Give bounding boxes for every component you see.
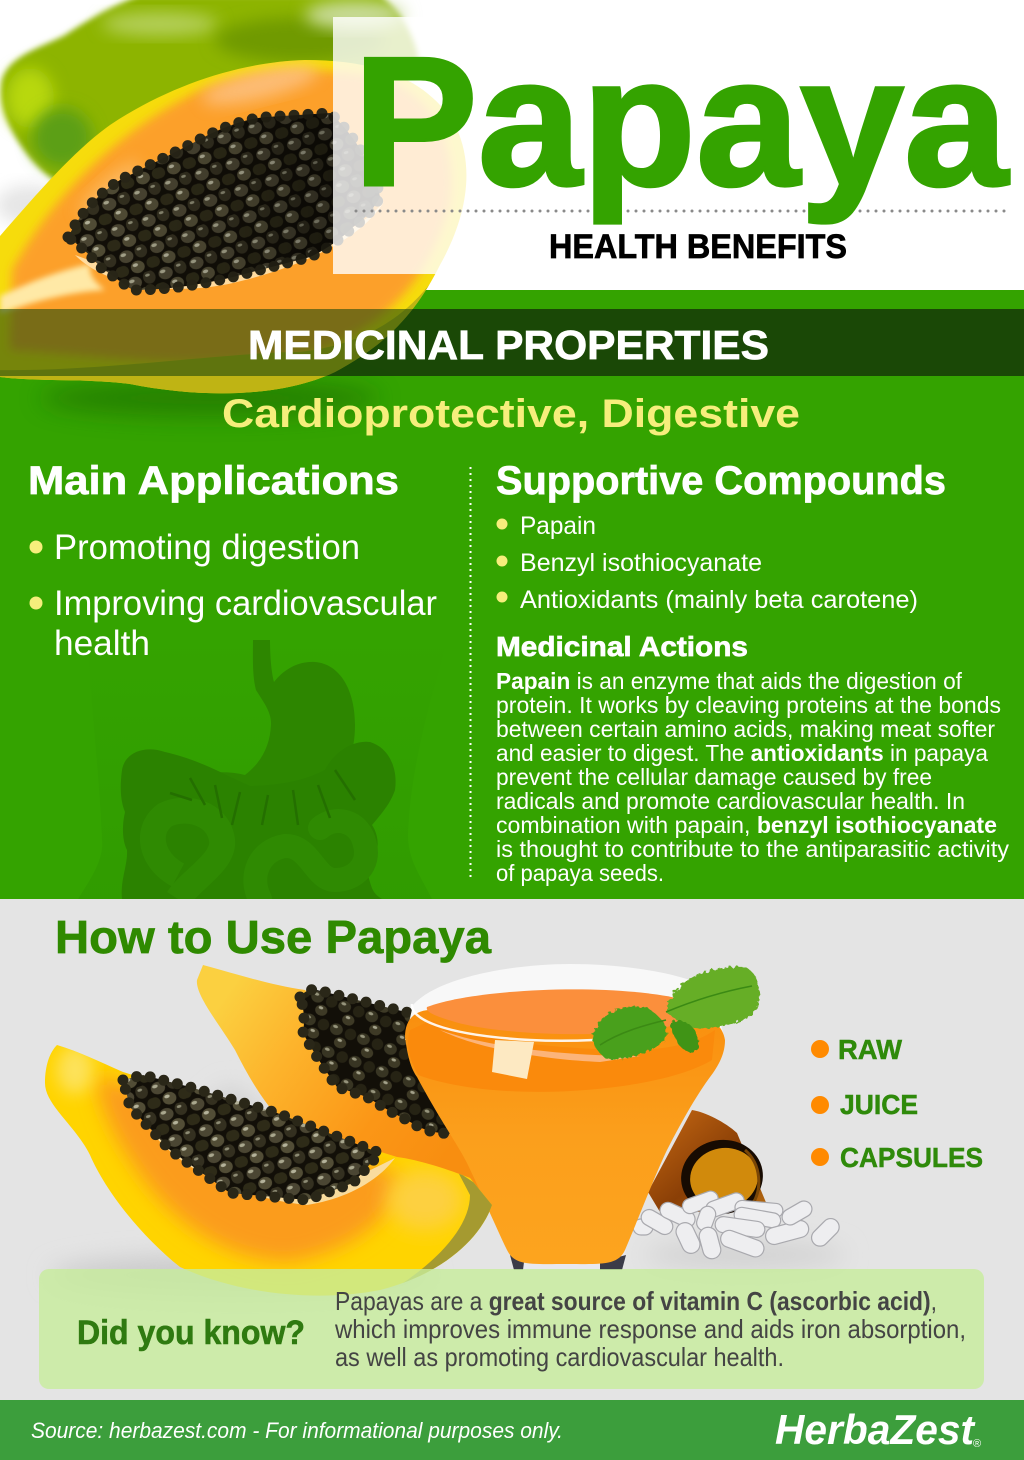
bottle interior [685,1143,763,1213]
paragraph: medicinal actions: prevent the cellular damage caused by free [496,764,932,790]
list: ways to use [811,1034,983,1173]
footer logo: HerbaZest: ® [973,1438,981,1450]
juice body [405,1010,725,1264]
item: raw [811,1034,903,1065]
photo: back papaya wedge [197,965,495,1205]
pale pulp around cavity [75,200,385,289]
dotted rule under title [356,210,1008,212]
glass foot [510,1250,626,1270]
item: raw: RAW [838,1034,903,1065]
callout text: Papayas are a great source of vitamin C (ascorbic acid), [335,1286,937,1316]
heading: main applications: Main Applications [28,459,399,503]
callout text: as well as promoting cardiovascular health. [335,1342,784,1372]
rim highlight [412,1004,650,1041]
subheading: cardioprotective, digestive: Cardioprotective, Digestive [222,392,800,436]
callout: did you know [39,1269,984,1389]
wedge yellow base [45,1045,492,1296]
dark title band [0,309,1024,376]
photo: whole green papaya [0,0,420,225]
capsules [633,1189,843,1261]
callout background [39,1269,984,1389]
soft floor shadows [50,1085,845,1295]
panel: main applications [28,459,437,663]
callout text: which improves immune response and aids iron absorption, [334,1314,966,1344]
dotted column divider [470,467,472,878]
bullet list: compounds: Papain [520,512,596,540]
photo: bottle of capsules [633,1110,843,1261]
wedge orange flesh [57,1046,500,1300]
green content panel background [0,290,1024,899]
glass rim back [405,964,725,1040]
item: capsules: CAPSULES [840,1142,983,1173]
bullet list: applications: Improving cardiovascular [54,584,437,623]
paragraph: medicinal actions: protein. It works by cleaving proteins at the bonds [496,692,1001,718]
title: Papaya: Papaya [353,18,1010,224]
seeds [123,1075,380,1200]
callout text [334,1286,966,1372]
bullet list: compounds: Benzyl isothiocyanate [520,549,762,577]
bullet list: compounds: Antioxidants (mainly beta carotene) [520,586,918,614]
bottle opening [675,1133,769,1221]
shadow under papaya [40,380,380,416]
glass foot shadows [510,1255,626,1270]
item: juice: JUICE [840,1089,918,1120]
paragraph: medicinal actions: and easier to digest. The antioxidants in papaya [496,740,988,766]
footer logo: HerbaZest: HerbaZest [775,1406,976,1453]
bullet list: compounds [496,512,918,614]
papaya skin rim [0,60,466,393]
heading: supportive compounds: Supportive Compounds [496,459,946,503]
heading: medicinal actions: Medicinal Actions [496,631,748,662]
bullet list: applications: health [54,624,150,663]
band light [440,1030,640,1062]
translucent white title backing [333,17,1024,274]
paragraph: medicinal actions [496,668,1009,886]
footer source text: Source: herbazest.com - For informational purposes only. [31,1418,563,1443]
paragraph: medicinal actions: combination with papain, benzyl isothiocyanate [496,812,997,838]
paragraph: medicinal actions: radicals and promote cardiovascular health. In [496,788,965,814]
grey how-to-use panel background [0,899,1024,1400]
heading: how to use papaya: How to Use Papaya [55,911,491,963]
bottle body [648,1110,770,1212]
photo: glass of papaya juice [405,964,725,1270]
icon: mint leaves [593,967,760,1059]
photo: cut papaya half with seeds [0,57,470,400]
rim light reflection [492,1040,534,1079]
inner glass band [408,1020,715,1092]
callout heading: Did you know? [77,1314,305,1352]
subtitle: HEALTH BENEFITS [549,228,847,266]
orange flesh [0,57,470,400]
seed cavity [68,113,380,290]
footer bar [0,1400,1024,1460]
bullet list: applications [30,528,437,663]
item: juice [811,1089,918,1120]
paragraph: medicinal actions: between certain amino acids, making meat softer [496,716,995,742]
paragraph: medicinal actions: of papaya seeds. [496,860,664,886]
seeds [300,990,453,1133]
bullet list: applications: Promoting digestion [54,528,360,567]
photo: front papaya wedge [45,1045,500,1300]
heading: medicinal properties: MEDICINAL PROPERTIES [248,322,769,368]
juice surface [427,989,690,1034]
paragraph: medicinal actions: Papain is an enzyme that aids the digestion of [496,668,963,694]
illustration: digestive system silhouette [78,640,448,899]
translucent band over papaya [0,309,1024,376]
pulp [150,1130,395,1205]
paragraph: medicinal actions: is thought to contribute to the antiparasitic activity [496,836,1009,862]
panel: supportive compounds [496,459,1009,886]
